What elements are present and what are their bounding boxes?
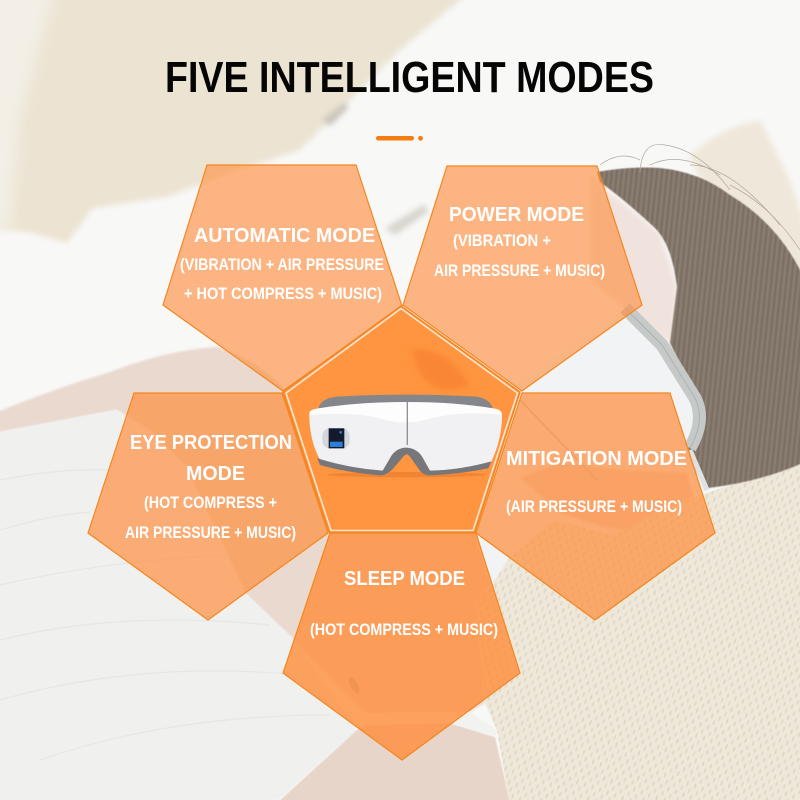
background: sleeve fold lines [0, 470, 330, 760]
background: dark fold under blanket [322, 102, 348, 126]
background: white cuff [367, 712, 497, 737]
background: hand [520, 462, 693, 530]
background: cream blanket top left [0, 0, 490, 243]
background: left blanket highlight [0, 0, 60, 230]
heading: power mode: POWER MODE [449, 203, 584, 226]
background: lower arm skin [278, 723, 510, 800]
text: automatic mode line 1: (VIBRATION + AIR PRESSURE [180, 256, 384, 274]
panel: mitigation mode [476, 393, 715, 620]
panel: automatic mode [163, 165, 402, 391]
text: automatic mode line 2: + HOT COMPRESS + MUSIC) [184, 285, 382, 303]
shadow patch inside center pentagon [412, 349, 470, 390]
panel: sleep mode [283, 533, 520, 760]
background: arm skin [0, 347, 510, 713]
background: sheet fold shadows [385, 204, 428, 235]
background: mask body on face [476, 312, 708, 587]
text: sleep mode detail: (HOT COMPRESS + MUSIC) [310, 621, 498, 639]
background: knit throw bottom right [474, 460, 800, 800]
heading: sleep mode: SLEEP MODE [344, 567, 465, 590]
text: mitigation mode detail: (AIR PRESSURE + MUSIC) [506, 498, 682, 516]
panel: power mode [403, 166, 642, 391]
icon: pin on sleeve seen through panel [347, 675, 361, 695]
background: forehead skin [590, 172, 677, 345]
background: mask crease [520, 400, 597, 480]
heading: eye protection mode line 1: EYE PROTECTION [130, 431, 292, 454]
background: cream pillow top right [690, 120, 800, 340]
background: hair wisps [600, 144, 800, 250]
background: mask strap [625, 308, 707, 490]
title: FIVE INTELLIGENT MODES [165, 54, 654, 102]
text: power mode line 1: (VIBRATION + [453, 232, 551, 250]
panel: eye protection mode [88, 393, 328, 620]
text: eye protection line 1: (HOT COMPRESS + [144, 494, 277, 512]
background: white sleeve [0, 410, 357, 800]
text: eye protection line 2: AIR PRESSURE + MUSIC) [125, 524, 296, 542]
heading: automatic mode: AUTOMATIC MODE [194, 224, 375, 247]
text: power mode line 2: AIR PRESSURE + MUSIC) [434, 262, 605, 280]
icon: eye massager product [309, 395, 502, 477]
title accent: bar and dot [376, 136, 423, 141]
heading: eye protection mode line 2: MODE [186, 462, 245, 485]
heading: mitigation mode: MITIGATION MODE [506, 447, 687, 470]
background: hair [597, 168, 800, 488]
panel: center product pentagon [283, 306, 520, 532]
